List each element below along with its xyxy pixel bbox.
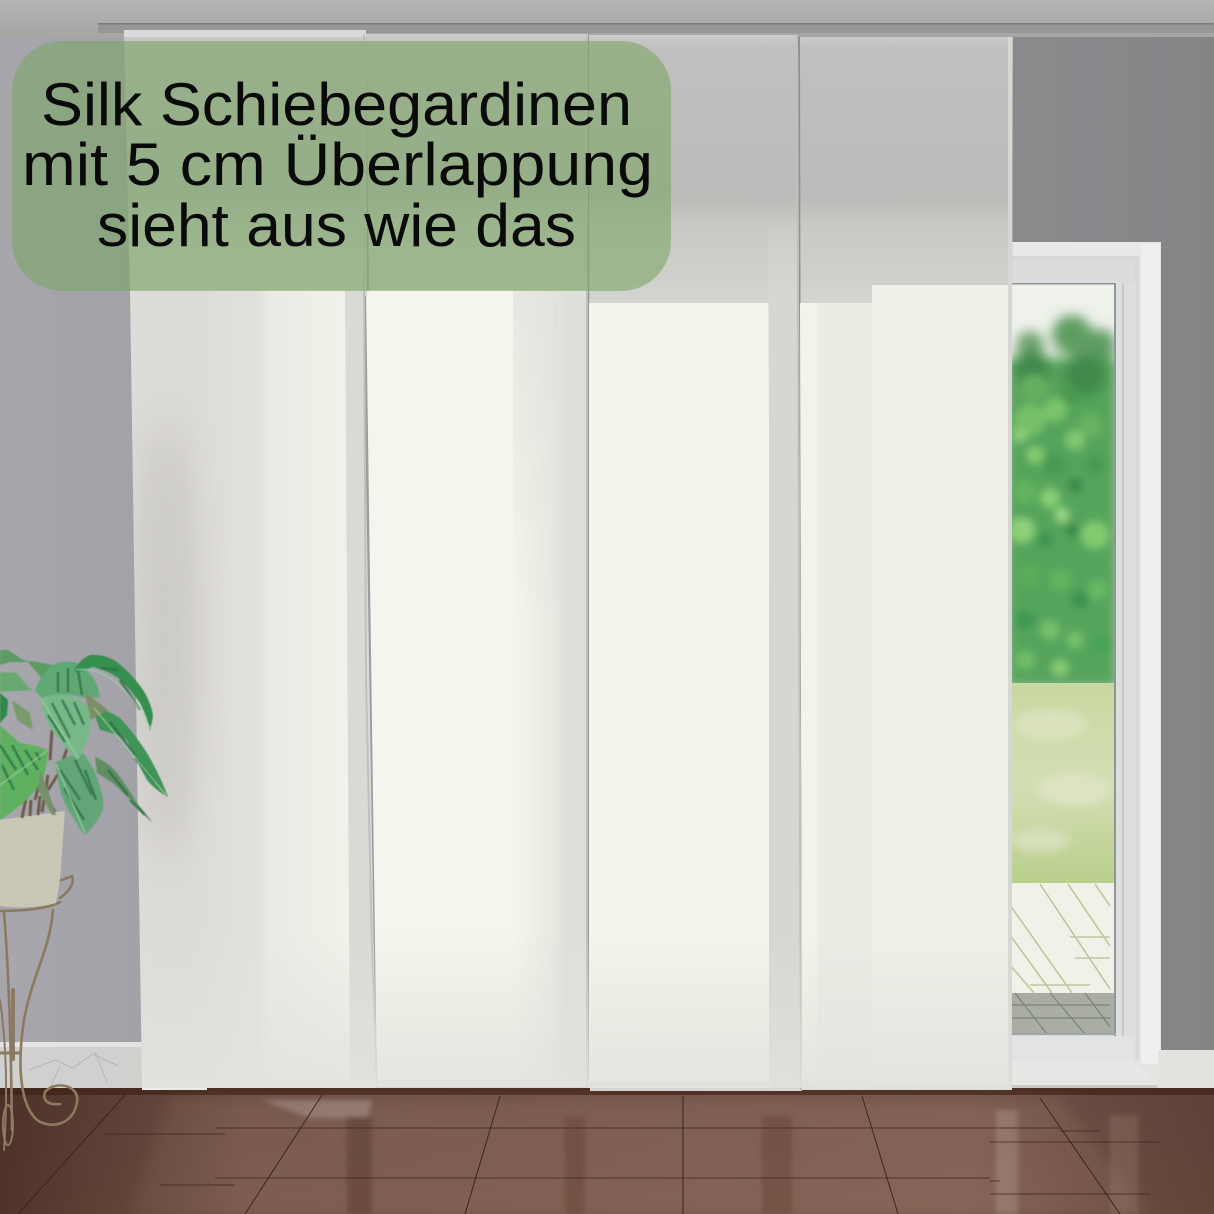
shaded paving <box>1010 993 1115 1034</box>
trees <box>1006 315 1118 688</box>
plant leaves <box>0 650 168 835</box>
plant pot <box>0 811 65 907</box>
ceiling <box>0 0 1214 37</box>
lawn <box>1010 683 1115 884</box>
floor <box>0 1088 1214 1214</box>
right baseboard <box>1158 1050 1214 1101</box>
glass edge <box>1114 284 1116 1036</box>
title <box>22 71 653 259</box>
outside view through glass <box>1006 284 1118 1034</box>
curtain rail <box>98 23 1214 33</box>
window <box>1005 242 1161 1089</box>
title: sieht aus wie das <box>97 192 576 259</box>
window sill <box>1005 1061 1157 1087</box>
curtain panel 4 <box>800 37 1013 1090</box>
curtain panel 1 <box>124 30 377 1090</box>
leaf stripes <box>0 668 155 820</box>
curtain bottom shading <box>141 930 1011 1088</box>
window casing <box>1005 242 1161 1089</box>
left baseboard <box>0 1042 142 1090</box>
back leaves <box>0 650 53 680</box>
tile joints <box>18 1095 1120 1214</box>
callout box with title <box>12 41 671 291</box>
title: mit 5 cm Überlappung <box>22 131 653 198</box>
plant stand <box>0 876 77 1150</box>
paving <box>1010 883 1115 994</box>
curtain panel 2 <box>366 34 590 1087</box>
curtain panel 3 <box>589 35 802 1091</box>
window frame <box>1005 256 1139 1060</box>
floor reflections <box>154 1101 1110 1210</box>
title: Silk Schiebegardinen <box>41 71 632 138</box>
